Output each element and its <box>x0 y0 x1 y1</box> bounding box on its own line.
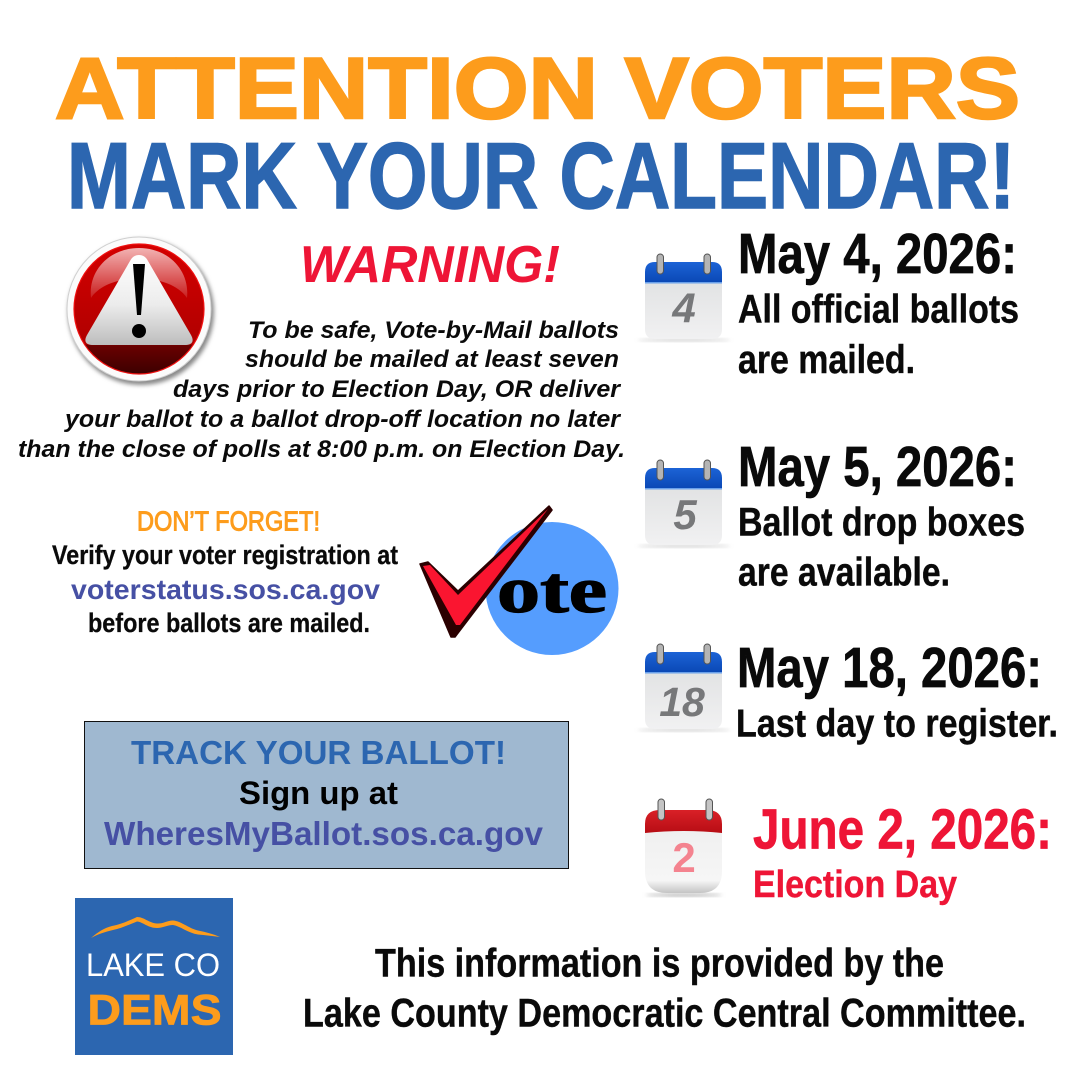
icon: calendar May 5 <box>638 460 730 548</box>
text block: don't forget: DON’T FORGET! <box>137 506 320 536</box>
date: May 5: are available. <box>738 550 950 594</box>
callout: track your ballot: TRACK YOUR BALLOT! <box>131 734 506 771</box>
icon: warning sign <box>67 237 214 385</box>
text block: warning message <box>18 317 625 463</box>
date: May 5: May 5, 2026: <box>738 435 1017 499</box>
callout: track your ballot <box>84 722 568 868</box>
logo: Lake Co Dems <box>75 898 233 1055</box>
icon: calendar May 5: 5 <box>673 491 697 538</box>
date: May 4: All official ballots <box>738 288 1019 332</box>
date: May 18 <box>736 636 1058 746</box>
date: June 2 <box>753 798 1052 906</box>
date: May 4 <box>738 222 1019 382</box>
icon: calendar May 18: 18 <box>659 679 705 725</box>
icon: calendar June 2 <box>645 799 722 896</box>
icon: vote checkmark: ote <box>497 554 607 627</box>
title: attention voters: ATTENTION VOTERS <box>55 41 1020 137</box>
icon: calendar May 4 <box>638 254 730 342</box>
callout: track your ballot: WheresMyBallot.sos.ca.gov <box>104 815 544 852</box>
icon: vote checkmark <box>420 506 618 655</box>
date: June 2: Election Day <box>753 864 957 906</box>
callout: track your ballot: Sign up at <box>239 775 398 811</box>
date: May 4: are mailed. <box>738 338 915 382</box>
date: May 5: Ballot drop boxes <box>738 500 1025 544</box>
icon: calendar June 2: 2 <box>672 834 696 881</box>
logo: Lake Co Dems: DEMS <box>88 986 222 1034</box>
text block: warning message: days prior to Election Day, OR deliver <box>173 376 621 403</box>
text block: don't forget: before ballots are mailed. <box>88 608 370 638</box>
text block: warning message: your ballot to a ballot drop-off location no later <box>63 406 621 433</box>
date: May 5 <box>738 435 1025 594</box>
footer text: This information is provided by the <box>375 942 944 986</box>
text block: don't forget: voterstatus.sos.ca.gov <box>71 574 380 605</box>
icon: calendar May 18 <box>638 644 730 732</box>
logo: Lake Co Dems: LAKE CO <box>86 947 220 983</box>
text block: warning message: than the close of polls at 8:00 p.m. on Election Day. <box>18 436 625 463</box>
text block: don't forget: Verify your voter registration at <box>52 540 398 570</box>
text block: don't forget <box>52 506 398 638</box>
heading: warning: WARNING! <box>300 236 560 294</box>
text block: warning message: should be mailed at least seven <box>245 346 619 373</box>
date: May 4: May 4, 2026: <box>738 222 1017 286</box>
icon: calendar May 4: 4 <box>671 284 696 332</box>
text block: warning message: To be safe, Vote-by-Mail ballots <box>248 317 619 344</box>
footer text <box>303 942 1026 1036</box>
